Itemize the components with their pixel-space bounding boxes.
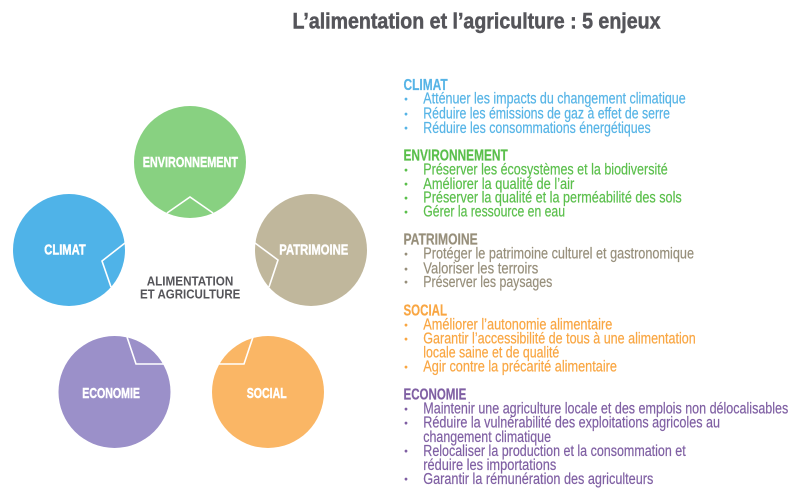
list: social: • xyxy=(404,334,408,346)
circle: patrimoine: PATRIMOINE xyxy=(279,241,348,258)
text block: environnement xyxy=(404,148,682,221)
list: economie: • xyxy=(404,418,408,430)
list: economie: Relocaliser la production et la consommation et xyxy=(423,443,686,460)
circle: social: SOCIAL xyxy=(247,385,287,402)
list: economie: • xyxy=(404,474,408,486)
list: environnement: • xyxy=(404,166,408,176)
centre label: ALIMENTATION xyxy=(147,274,233,289)
list: economie: Garantir la rémunération des agriculteurs xyxy=(423,471,654,488)
list: environnement: Préserver les écosystèmes et la biodiversité xyxy=(423,162,668,179)
list: environnement: • xyxy=(404,180,408,190)
list: economie: • xyxy=(404,446,408,458)
list: environnement: Améliorer la qualité de l’air xyxy=(423,176,574,193)
circle: environnement xyxy=(134,106,246,218)
list: patrimoine: Valoriser les terroirs xyxy=(423,261,539,278)
list: social: Agir contre la précarité alimentaire xyxy=(423,359,617,376)
circle: environnement: ENVIRONNEMENT xyxy=(143,154,238,171)
list: climat xyxy=(404,91,686,137)
list: climat: • xyxy=(404,110,408,120)
list: environnement: • xyxy=(404,194,408,204)
list: social xyxy=(404,317,696,376)
list: environnement: Gérer la ressource en eau xyxy=(423,204,565,221)
list: economie: réduire les importations xyxy=(423,457,556,474)
list: climat: Réduire les émissions de gaz à effet de serre xyxy=(423,106,670,123)
list: patrimoine: • xyxy=(404,250,408,260)
list: environnement: Préserver la qualité et la perméabilité des sols xyxy=(423,190,682,207)
circle: social xyxy=(212,336,324,448)
list: environnement: • xyxy=(404,208,408,218)
list: social: • xyxy=(404,362,408,374)
list: patrimoine: • xyxy=(404,264,408,276)
circle: climat: CLIMAT xyxy=(44,241,86,258)
text block: economie xyxy=(404,387,789,488)
list: economie: • xyxy=(404,404,408,416)
heading: environnement: ENVIRONNEMENT xyxy=(404,148,508,165)
heading: economie: ECONOMIE xyxy=(404,387,466,404)
list: climat: Atténuer les impacts du changement climatique xyxy=(423,91,686,108)
circle: economie xyxy=(58,336,170,448)
circle: patrimoine xyxy=(255,194,367,306)
list: patrimoine: • xyxy=(404,278,408,288)
text block: climat xyxy=(404,77,686,137)
list: social: • xyxy=(404,320,408,332)
circle: economie: ECONOMIE xyxy=(82,385,140,402)
list: patrimoine: Protéger le patrimoine culturel et gastronomique xyxy=(423,246,694,263)
list: economie: changement climatique xyxy=(423,429,551,446)
list: economie xyxy=(404,401,789,488)
list: patrimoine: Préserver les paysages xyxy=(423,274,552,291)
heading: patrimoine: PATRIMOINE xyxy=(404,232,478,249)
title: L’alimentation et l’agriculture : 5 enjeux xyxy=(292,8,661,34)
list: social: locale saine et de qualité xyxy=(423,345,559,362)
list: social: Garantir l’accessibilité de tous à une alimentation xyxy=(423,331,696,348)
list: environnement xyxy=(404,162,682,221)
heading: climat: CLIMAT xyxy=(404,77,448,94)
diagram: five stakes around food and agriculture xyxy=(13,106,367,448)
list: climat: • xyxy=(404,124,408,134)
circle: climat xyxy=(13,194,125,306)
heading: social: SOCIAL xyxy=(404,303,447,320)
list: patrimoine xyxy=(404,246,694,291)
list: climat: • xyxy=(404,94,408,106)
text block: social xyxy=(404,303,696,376)
centre label: ET AGRICULTURE xyxy=(140,286,241,301)
list: economie: Réduire la vulnérabilité des exploitations agricoles au xyxy=(423,415,720,432)
centre label xyxy=(140,274,241,301)
text block: patrimoine xyxy=(404,232,694,291)
list: climat: Réduire les consommations énergétiques xyxy=(423,120,651,137)
list: social: Améliorer l’autonomie alimentaire xyxy=(423,317,612,334)
